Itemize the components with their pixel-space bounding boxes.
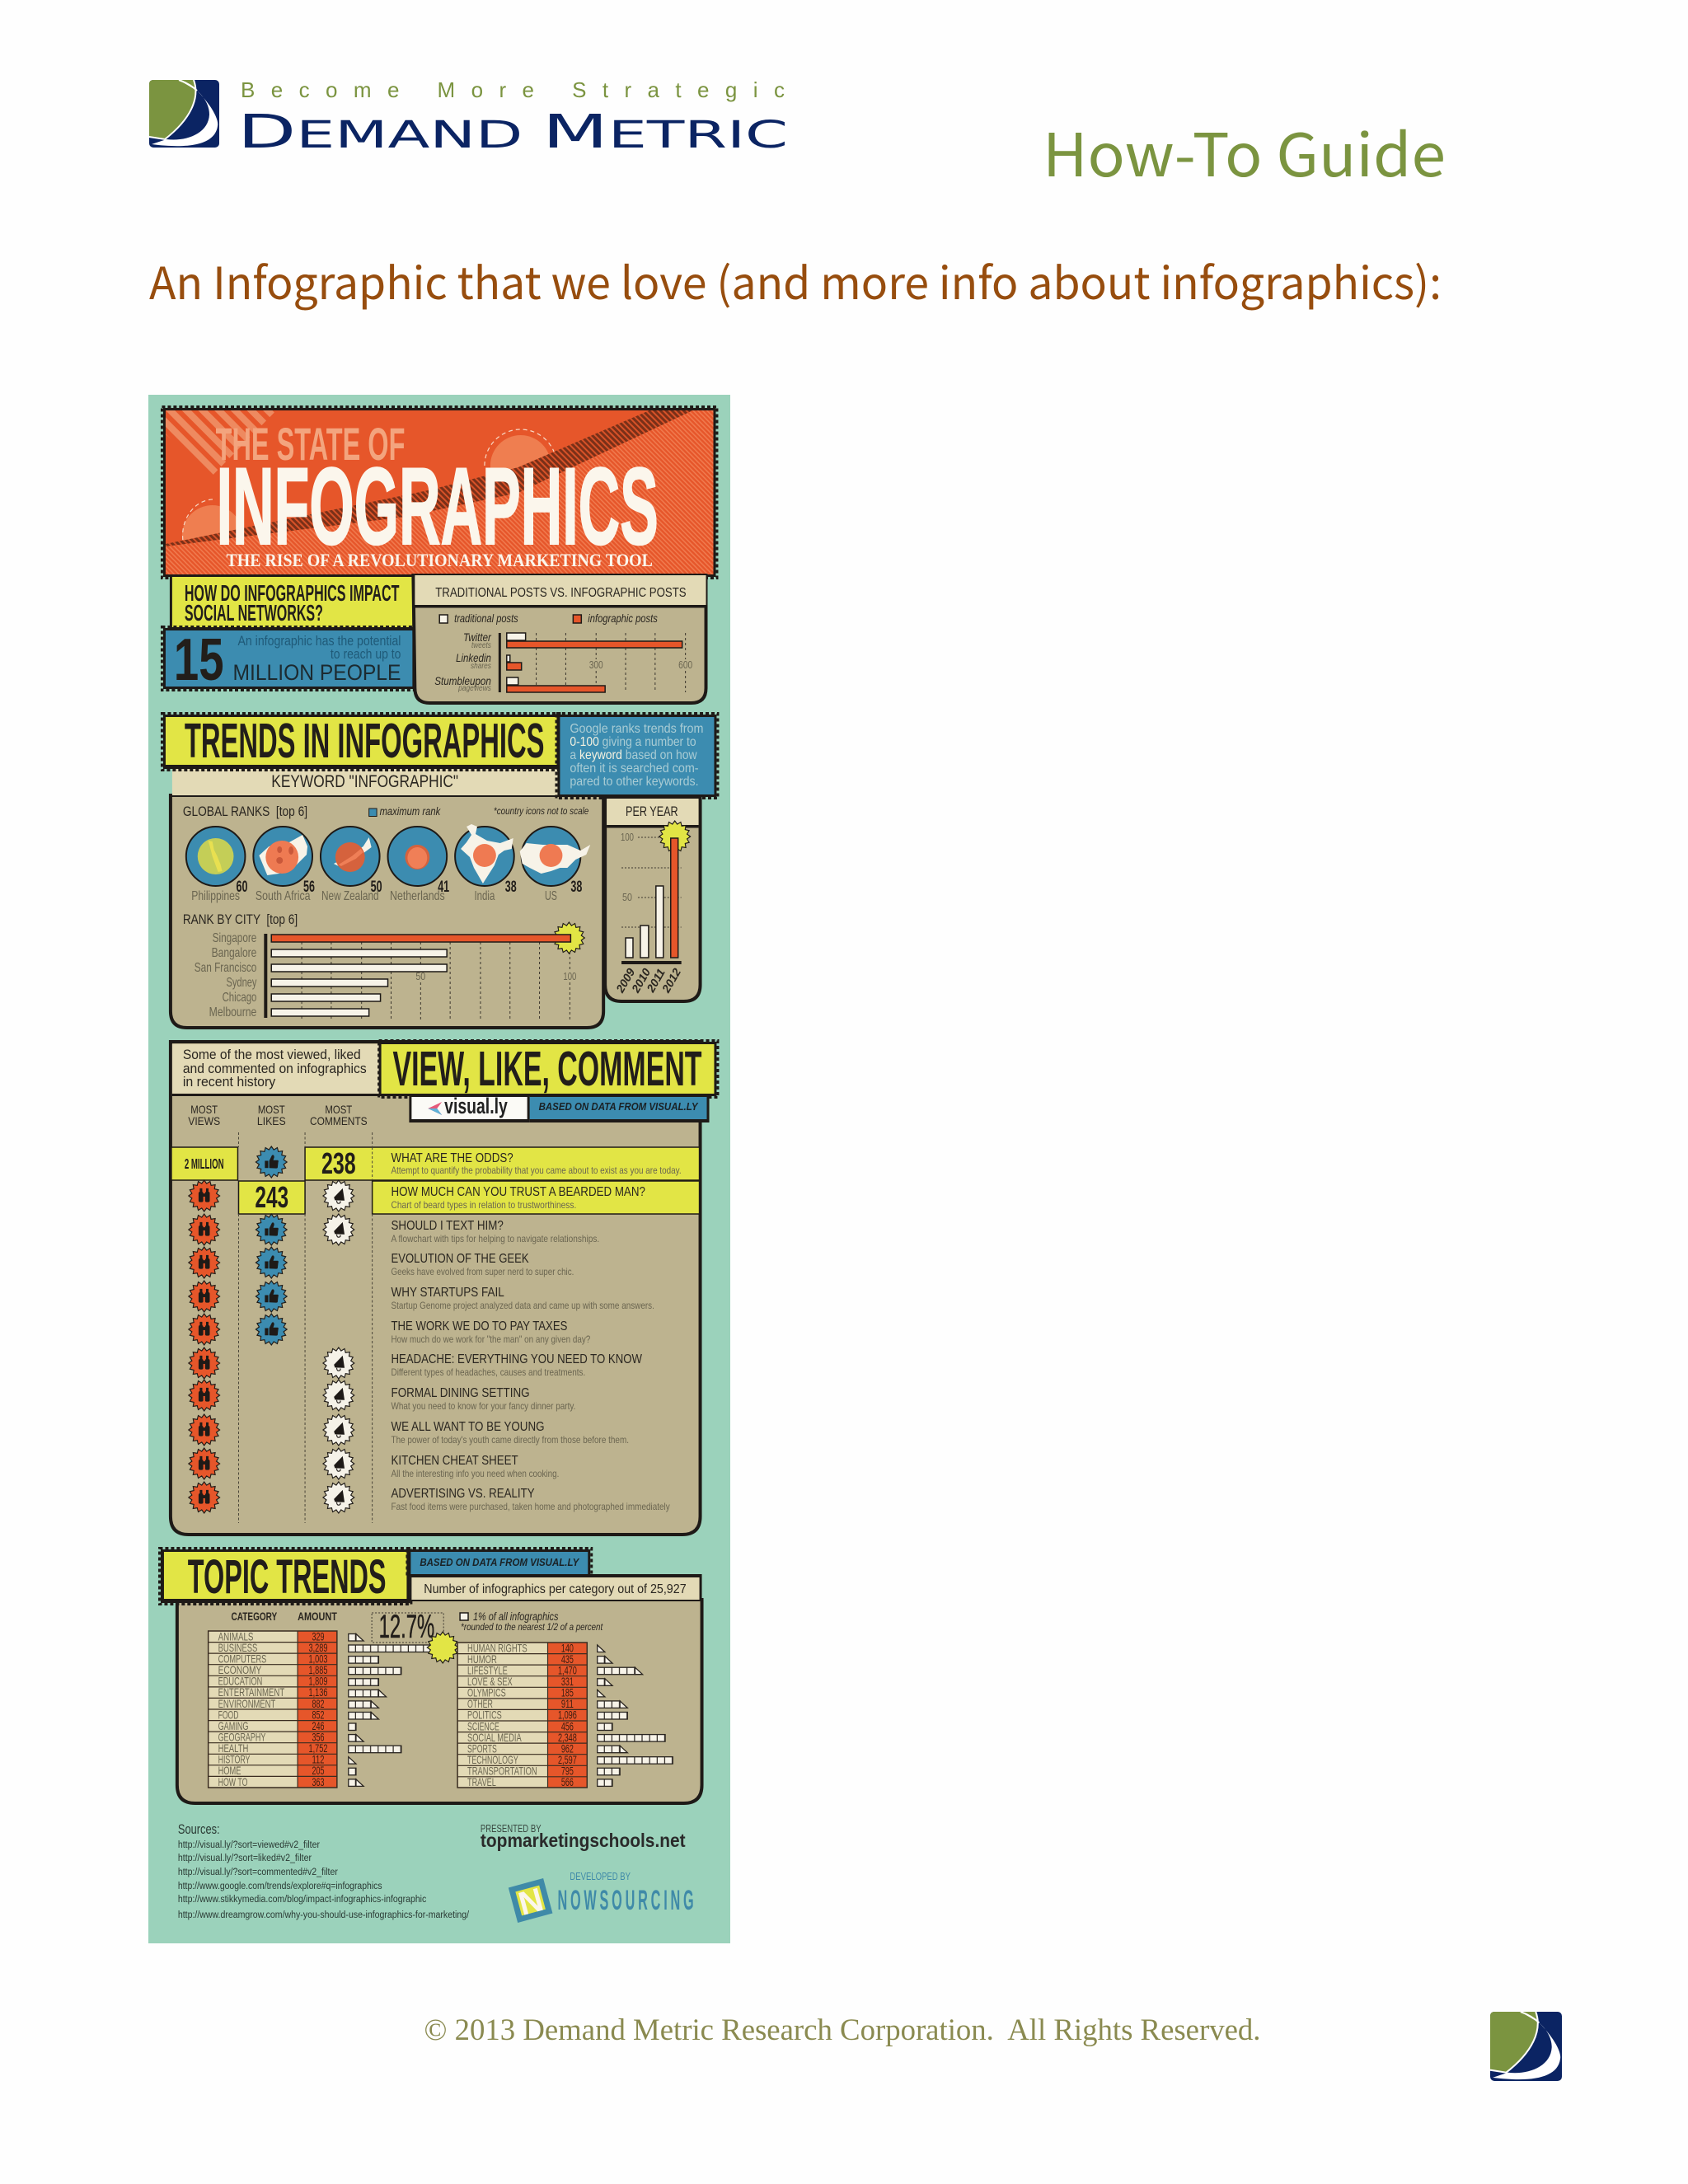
country: Netherlands: Netherlands: [390, 889, 445, 903]
country: Philippines: 60: [236, 879, 247, 896]
panel: traditional posts vs infographic posts: [413, 575, 706, 703]
table: categories H to T: 1,470: [558, 1663, 577, 1677]
column headings: LIKES: [257, 1115, 286, 1127]
country: Philippines: [186, 827, 247, 903]
visual.ly logo: [409, 1094, 530, 1122]
heading: topic trends: [159, 1548, 411, 1604]
bar chart: rank by city: Sydney: [227, 976, 257, 990]
table: categories H to T: 140: [561, 1641, 574, 1655]
keyword box: [172, 769, 557, 795]
row: advertising vs reality: ADVERTISING VS. REALITY: [392, 1487, 535, 1501]
credit: developed by nowsourcing: NOWSOURCING: [557, 1884, 694, 1916]
source badge: BASED ON DATA FROM VISUAL.LY: [420, 1556, 580, 1568]
row: kitchen cheat sheet: All the interesting info you need when cooking.: [392, 1469, 559, 1479]
infographic content: [159, 407, 718, 1924]
credit: developed by nowsourcing: DEVELOPED BY: [570, 1870, 631, 1882]
row: advertising vs reality: [189, 1482, 670, 1513]
heading: intro line: An Infographic that we love (and more info about infographics):: [149, 247, 1442, 312]
table: categories H to T: 456: [561, 1719, 574, 1733]
credit: presented by: PRESENTED BY: [481, 1822, 542, 1835]
row: what are the odds: 2 MILLION: [185, 1155, 224, 1172]
bar chart: posts: 600: [678, 659, 692, 671]
table: categories A to H: GEOGRAPHY: [218, 1731, 265, 1744]
table: categories H to T: 2,348: [558, 1731, 577, 1744]
title banner: THE STATE OF: [216, 418, 405, 470]
table: categories A to H: 205: [312, 1764, 325, 1777]
bar chart: per year: 100: [621, 832, 634, 843]
row: why startups fail: WHY STARTUPS FAIL: [392, 1286, 504, 1300]
sources list: http://visual.ly/?sort=viewed#v2_filter: [178, 1839, 320, 1850]
table: categories A to H: HOW TO: [218, 1776, 247, 1788]
source badge: BASED ON DATA FROM VISUAL.LY: [539, 1100, 699, 1113]
panel: trends in infographics: [162, 714, 718, 1028]
table: categories A to H: 852: [312, 1708, 325, 1722]
bar chart: rank by city: 50: [415, 971, 425, 982]
callout: 15 million people: MILLION PEOPLE: [233, 660, 401, 685]
legend: maximum rank: maximum rank: [380, 804, 441, 818]
source badge: [530, 1095, 709, 1122]
bar chart: rank by city: San Francisco: [195, 961, 256, 975]
heading: How-To Guide: How-To Guide: [1043, 107, 1446, 194]
table: categories A to H: 1,752: [309, 1741, 328, 1755]
source badge: [407, 1548, 592, 1576]
row: the work we do to pay taxes: THE WORK WE DO TO PAY TAXES: [392, 1319, 567, 1333]
table: categories H to T: 795: [561, 1764, 574, 1778]
row: the work we do to pay taxes: [189, 1314, 590, 1345]
callout: google ranks explanation: [556, 714, 718, 798]
panel: per year chart: [605, 798, 701, 1001]
row: should I text him: A flowchart with tips for helping to navigate relationships.: [392, 1235, 599, 1244]
row: headache: [189, 1347, 642, 1379]
panel: view, like, comment: [171, 1040, 718, 1535]
title banner: THE RISE OF A REVOLUTIONARY MARKETING TOOL: [227, 550, 653, 570]
table: categories A to H: HEALTH: [218, 1742, 248, 1755]
table: categories A to H: 1,136: [309, 1685, 328, 1699]
legend: traditional posts: [454, 612, 518, 625]
table: categories H to T: TRAVEL: [467, 1776, 496, 1788]
column dividers: [238, 1132, 373, 1523]
bar chart: posts: tweets: [471, 641, 491, 650]
table: categories A to H: 882: [312, 1697, 325, 1710]
note: icons not to scale: *country icons not to scale: [494, 805, 589, 817]
heading: topic trends: TOPIC TRENDS: [188, 1551, 387, 1604]
table: categories A to H: FOOD: [218, 1708, 239, 1722]
callout: google ranks explanation: Google ranks trends from: [570, 722, 704, 736]
row: why startups fail: [189, 1281, 654, 1312]
country: South Africa: [253, 827, 315, 903]
bar chart: posts: shares: [471, 662, 491, 671]
row: evolution of the geek: Geeks have evolved from super nerd to super chic.: [392, 1268, 574, 1277]
callout: google ranks explanation: often it is searched com-: [570, 762, 699, 776]
row: should I text him: [189, 1214, 599, 1245]
table: categories A to H: 356: [312, 1730, 325, 1744]
row: headache: Different types of headaches, causes and treatments.: [392, 1368, 585, 1378]
heading: trends in infographics: [162, 714, 560, 770]
heading: global ranks: GLOBAL RANKS [top 6]: [183, 804, 307, 819]
per year heading: PER YEAR: [626, 804, 678, 819]
table: categories A to H: ENTERTAINMENT: [218, 1686, 284, 1699]
row: bearded man: 243: [255, 1181, 288, 1214]
sources list: Sources:: [178, 1822, 220, 1837]
table: categories H to T: TECHNOLOGY: [467, 1754, 518, 1766]
table: categories H to T: OTHER: [467, 1698, 493, 1710]
infographic panel: [148, 395, 730, 1943]
footer logo: [1490, 2012, 1562, 2081]
country: South Africa: South Africa: [256, 889, 311, 903]
table: categories H to T: 2,597: [558, 1753, 577, 1766]
table: categories H to T: POLITICS: [467, 1709, 502, 1722]
callout: google ranks explanation: a keyword based on how: [570, 748, 697, 762]
row: formal dining setting: FORMAL DINING SETTING: [392, 1386, 530, 1400]
credit: presented by: [481, 1822, 686, 1851]
panel: topic trends: [159, 1548, 702, 1803]
intro text box: Some of the most viewed, liked: [183, 1047, 361, 1062]
credit: developed by nowsourcing: N: [515, 1882, 547, 1923]
row: evolution of the geek: EVOLUTION OF THE GEEK: [392, 1252, 529, 1266]
country: US: 38: [570, 879, 582, 896]
infographic background: [148, 395, 730, 1943]
bar chart: posts: Linkedin: [456, 651, 491, 664]
header logo: Demand Metric: Become More Strategic: [241, 77, 785, 102]
sources list: [178, 1822, 470, 1920]
icon: highlight star for business: [427, 1632, 458, 1663]
bar chart: per year: [613, 821, 691, 996]
callout: 15 million people: to reach up to: [331, 646, 401, 662]
row: the work we do to pay taxes: How much do we work for "the man" on any given day?: [392, 1335, 590, 1345]
legend: one percent: 1% of all infographics: [473, 1610, 558, 1623]
credit: presented by: topmarketingschools.net: [481, 1830, 686, 1851]
sources list: http://www.stikkymedia.com/blog/impact-infographics-infographic: [178, 1893, 426, 1905]
intro text box: and commented on infographics: [183, 1061, 367, 1076]
table: categories H to T: LOVE & SEX: [467, 1675, 513, 1688]
row: advertising vs reality: Fast food items were purchased, taken home and photographed immediately: [392, 1502, 670, 1512]
country: India: India: [474, 889, 495, 903]
row: bearded man: [189, 1180, 700, 1214]
table: categories A to H: BUSINESS: [218, 1642, 257, 1654]
callout: 15 million people: 15: [174, 627, 224, 693]
bar chart: rank by city: 100: [563, 971, 576, 982]
unit bars: categories H to T: [598, 1645, 673, 1786]
table: categories A to H: COMPUTERS: [218, 1652, 266, 1666]
unit bars: categories A to H: [349, 1633, 447, 1786]
subtitle: number of infographics: [410, 1574, 702, 1601]
country: Philippines: Philippines: [191, 889, 240, 903]
table: categories H to T: 911: [561, 1697, 574, 1710]
panel heading: [415, 575, 706, 608]
table: categories H to T: 435: [561, 1652, 574, 1666]
sources list: http://visual.ly/?sort=commented#v2_filter: [178, 1866, 338, 1877]
table: categories H to T: 331: [561, 1675, 574, 1688]
bar chart: rank by city: Singapore: [213, 931, 256, 945]
heading: trends in infographics: TRENDS IN INFOGRAPHICS: [185, 715, 545, 768]
table: categories H to T: [457, 1641, 587, 1788]
table: categories A to H: 363: [312, 1775, 325, 1788]
row: should I text him: SHOULD I TEXT HIM?: [392, 1219, 504, 1233]
intro text box: [172, 1044, 379, 1096]
country: Netherlands: 41: [438, 879, 449, 896]
country: New Zealand: 50: [371, 879, 382, 896]
country: New Zealand: [321, 827, 382, 903]
table: categories H to T: 566: [561, 1775, 574, 1788]
column headings: VIEWS: [188, 1115, 220, 1127]
table headings: [232, 1610, 337, 1623]
panel heading: TRADITIONAL POSTS VS. INFOGRAPHIC POSTS: [435, 586, 687, 600]
table: categories A to H: GAMING: [218, 1720, 248, 1732]
bar chart: rank by city: Melbourne: [209, 1005, 256, 1019]
bar chart: posts: pageviews: [457, 684, 491, 693]
country: US: [520, 827, 590, 903]
table: categories H to T: 1,096: [558, 1708, 577, 1722]
table: categories A to H: ANIMALS: [218, 1630, 253, 1643]
table: categories H to T: SPORTS: [467, 1742, 497, 1755]
table: categories H to T: SCIENCE: [467, 1720, 499, 1733]
table: categories A to H: ECONOMY: [218, 1664, 261, 1676]
table: categories A to H: ENVIRONMENT: [218, 1698, 275, 1710]
table: categories A to H: HISTORY: [218, 1754, 250, 1766]
table: categories A to H: 3,289: [309, 1641, 328, 1654]
callout: how do infographics impact social networks: SOCIAL NETWORKS?: [185, 600, 323, 626]
table: categories H to T: SOCIAL MEDIA: [467, 1732, 522, 1744]
row: what are the odds: [171, 1146, 700, 1180]
bar chart: posts: [434, 630, 692, 693]
bar chart: posts: 300: [589, 659, 603, 671]
row: formal dining setting: What you need to know for your fancy dinner party.: [392, 1402, 575, 1412]
table: categories H to T: HUMAN RIGHTS: [467, 1642, 528, 1655]
bar chart: per year: 2009: [613, 966, 637, 996]
legend: one percent: [460, 1610, 603, 1633]
heading: rank by city: RANK BY CITY [top 6]: [183, 912, 298, 927]
callout: google ranks explanation: 0-100 giving a number to: [570, 735, 696, 749]
callout: 12.7 percent: 12.7%: [379, 1609, 434, 1645]
bar chart: per year: 2011: [644, 966, 668, 995]
row: we all want to be young: The power of today's youth came directly from those before them.: [392, 1436, 629, 1446]
table: categories A to H: HOME: [218, 1765, 241, 1777]
row: evolution of the geek: [189, 1247, 574, 1278]
country: US: US: [545, 889, 557, 903]
row: we all want to be young: [189, 1414, 629, 1446]
bar chart: rank by city: Bangalore: [212, 946, 256, 960]
country: New Zealand: New Zealand: [321, 889, 379, 903]
callout: how do infographics impact social networks: [170, 575, 414, 630]
table: categories H to T: 185: [561, 1686, 574, 1699]
per year heading: [607, 799, 699, 827]
subtitle: number of infographics: Number of infographics per category out of 25,927: [424, 1582, 687, 1596]
table: categories A to H: 1,809: [309, 1675, 328, 1688]
bar chart: per year: 50: [622, 892, 632, 903]
title banner: INFOGRAPHICS: [217, 446, 659, 568]
header logo: Demand Metric: D EMAND M ETRIC: [237, 105, 788, 159]
credit: developed by nowsourcing: [509, 1870, 694, 1924]
callout: 15 million people: An infographic has the potential: [237, 633, 401, 649]
column headings: MOST: [325, 1104, 352, 1116]
table: categories A to H: 1,003: [309, 1652, 328, 1666]
row: bearded man: Chart of beard types in relation to trustworthiness.: [392, 1201, 576, 1211]
bar chart: per year: 2010: [628, 966, 653, 996]
sources list: http://www.dreamgrow.com/why-you-should-use-infographics-for-marketing/: [178, 1909, 470, 1920]
sources list: http://www.google.com/trends/explore#q=infographics: [178, 1880, 382, 1891]
column headings: [188, 1104, 368, 1127]
table: categories H to T: 962: [561, 1741, 574, 1755]
row: kitchen cheat sheet: [189, 1448, 559, 1479]
row: we all want to be young: WE ALL WANT TO BE YOUNG: [392, 1420, 545, 1434]
table: categories A to H: 112: [312, 1753, 325, 1766]
bar chart: posts: Twitter: [463, 630, 492, 644]
heading: view, like, comment: VIEW, LIKE, COMMENT: [393, 1043, 702, 1096]
legend: [439, 612, 658, 625]
country: India: [455, 824, 517, 903]
legend: infographic posts: [588, 612, 658, 625]
keyword box: KEYWORD "INFOGRAPHIC": [271, 772, 458, 791]
table headings: AMOUNT: [298, 1610, 337, 1623]
row: why startups fail: Startup Genome project analyzed data and came up with some answers.: [392, 1301, 654, 1311]
row: formal dining setting: [189, 1380, 575, 1412]
table: categories A to H: EDUCATION: [218, 1675, 262, 1688]
callout: 12.7 percent: [372, 1609, 443, 1645]
heading: view, like, comment: [379, 1040, 718, 1098]
bar chart: posts: Stumbleupon: [434, 674, 491, 687]
row: what are the odds: 238: [321, 1147, 356, 1180]
title banner: [162, 407, 717, 579]
table: categories H to T: OLYMPICS: [467, 1687, 506, 1699]
country: South Africa: 56: [303, 879, 315, 896]
bar chart: rank by city: [195, 922, 584, 1019]
visual.ly logo: visual.ly: [444, 1094, 508, 1118]
row: kitchen cheat sheet: KITCHEN CHEAT SHEET: [392, 1454, 518, 1468]
callout: 15 million people: [162, 626, 415, 693]
column headings: MOST: [190, 1104, 218, 1116]
sources list: http://visual.ly/?sort=liked#v2_filter: [178, 1852, 312, 1863]
table: categories A to H: 246: [312, 1719, 325, 1732]
callout: how do infographics impact social networks: HOW DO INFOGRAPHICS IMPACT: [185, 580, 400, 606]
row: what are the odds: Attempt to quantify the probability that you came about to exist as you are today.: [392, 1166, 682, 1176]
country: India: 38: [505, 879, 517, 896]
legend: one percent: *rounded to the nearest 1/2 of a percent: [461, 1621, 603, 1633]
bar chart: rank by city: Chicago: [223, 991, 256, 1005]
intro text box: in recent history: [183, 1074, 276, 1090]
table: categories H to T: TRANSPORTATION: [467, 1765, 537, 1778]
callout: google ranks explanation: pared to other keywords.: [570, 775, 699, 789]
row: headache: HEADACHE: EVERYTHING YOU NEED TO KNOW: [392, 1352, 642, 1366]
row: bearded man: HOW MUCH CAN YOU TRUST A BEARDED MAN?: [392, 1185, 645, 1199]
column headings: COMMENTS: [310, 1115, 368, 1127]
table: categories H to T: LIFESTYLE: [467, 1664, 508, 1677]
table headings: CATEGORY: [232, 1610, 278, 1623]
table: categories A to H: 1,885: [309, 1663, 328, 1676]
table: categories A to H: [209, 1629, 337, 1788]
footer copyright: © 2013 Demand Metric Research Corporation. All Rights Reserved.: [424, 2013, 1261, 2047]
table: categories H to T: HUMOR: [467, 1653, 497, 1666]
header logo: Demand Metric: [149, 77, 788, 159]
row: what are the odds: WHAT ARE THE ODDS?: [392, 1151, 513, 1165]
country: Netherlands: [388, 827, 449, 903]
bar chart: per year: 2012: [659, 966, 683, 996]
column headings: MOST: [258, 1104, 285, 1116]
table: categories A to H: 329: [312, 1629, 325, 1643]
